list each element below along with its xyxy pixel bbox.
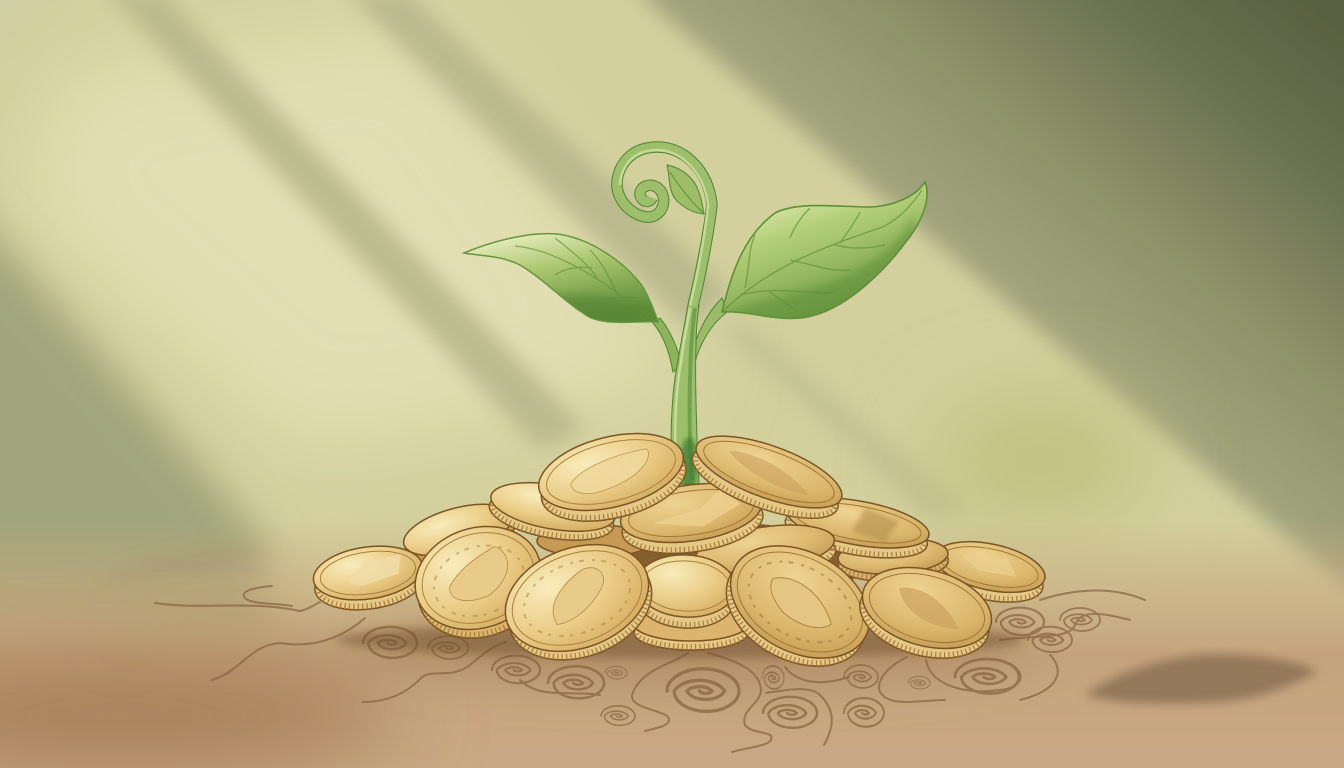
icon: stem base — [671, 305, 699, 493]
roots and swirls under the coins — [155, 586, 1145, 752]
sprout plant — [464, 147, 930, 493]
contact shadow under the coin pile — [335, 622, 1025, 658]
icon: coin 15 — [707, 523, 889, 689]
icon: coin 6 — [693, 517, 839, 590]
icon: coin 3 — [928, 533, 1050, 611]
icon: coin 5 — [782, 489, 933, 567]
icon: left leaf — [464, 234, 658, 335]
icon: coin 4 — [837, 535, 949, 584]
icon: right branch — [694, 298, 727, 366]
icon: coin 9 — [684, 421, 850, 533]
icon: coin 7 — [617, 475, 767, 562]
icon: coin 16 — [851, 554, 1001, 671]
icon: coin 1 — [398, 494, 520, 573]
icon: coin 12 — [634, 607, 748, 650]
icon: curled stem tip — [617, 147, 712, 306]
icon: left branch — [652, 318, 681, 372]
icon: coin 2 — [486, 474, 619, 548]
coin pile — [310, 420, 1050, 689]
icon: coin 10 — [310, 540, 427, 616]
icon: coin 14 — [490, 526, 667, 679]
icon: right leaf — [722, 182, 930, 330]
icon: coin 17 (behind the middle) — [537, 525, 653, 557]
icon: coin 11 — [402, 511, 557, 654]
icon: coin 8 — [531, 420, 694, 535]
icon: coin 13 — [634, 552, 738, 631]
dark gaps between coins — [595, 522, 855, 622]
icon: small bud leaf — [667, 165, 704, 214]
ground shadow — [1085, 654, 1318, 704]
